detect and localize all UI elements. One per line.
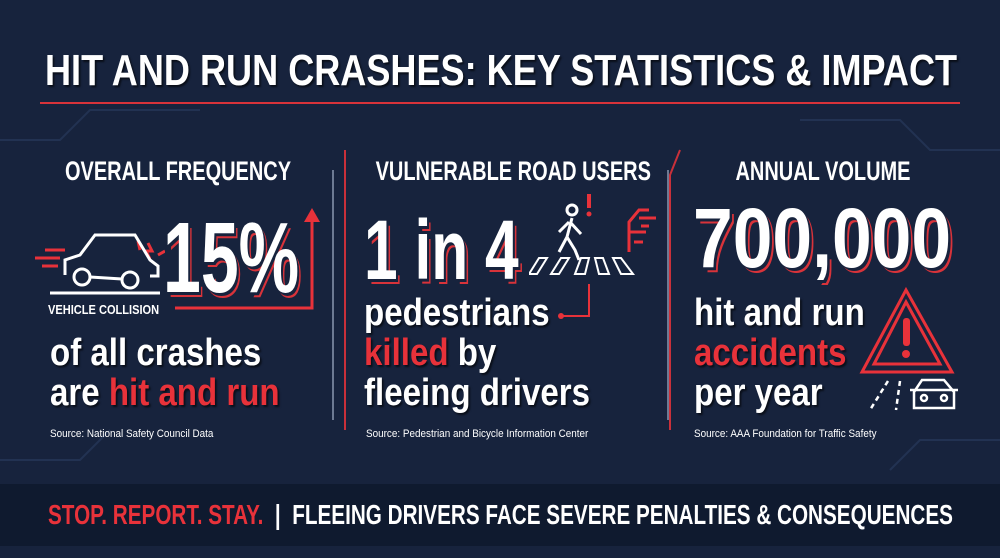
icon: pedestrian and car (529, 194, 656, 319)
label: vehicle collision: VEHICLE COLLISION (48, 302, 159, 317)
source: Source: AAA Foundation for Traffic Safety (694, 428, 877, 440)
text block: are hit and run (50, 372, 280, 414)
text block: per year (694, 372, 823, 414)
text block: hit and run (694, 292, 865, 334)
icon: car collision (35, 234, 165, 294)
heading: OVERALL FREQUENCY (65, 156, 291, 186)
text block (50, 332, 280, 414)
panel: annual volume (693, 156, 958, 440)
panel: overall frequency (35, 156, 320, 440)
text block: fleeing drivers (364, 372, 590, 414)
text block: killed by (364, 332, 496, 374)
bottom banner (0, 484, 1000, 546)
banner text: STOP. REPORT. STAY. | FLEEING DRIVERS FACE SEVERE PENALTIES & CONSEQUENCES (48, 499, 953, 530)
stat: 1 in 4: 1 in 4 (364, 203, 519, 297)
text block (694, 292, 865, 416)
title: HIT AND RUN CRASHES: KEY STATISTICS & IMPACT (45, 46, 957, 95)
panel: vulnerable road users (364, 156, 656, 440)
text block: accidents (694, 332, 847, 374)
stat: 15%: 15% (163, 202, 299, 314)
heading: ANNUAL VOLUME (735, 156, 911, 186)
text block: pedestrians (364, 292, 550, 334)
source: Source: National Safety Council Data (50, 428, 213, 440)
icon: warning triangle and car (860, 287, 958, 410)
source: Source: Pedestrian and Bicycle Information Center (366, 428, 588, 440)
text block (364, 292, 591, 416)
arrow (175, 208, 320, 310)
heading: VULNERABLE ROAD USERS (376, 156, 651, 186)
stat: 700,000: 700,000 (693, 191, 951, 285)
text block: of all crashes (50, 332, 261, 374)
